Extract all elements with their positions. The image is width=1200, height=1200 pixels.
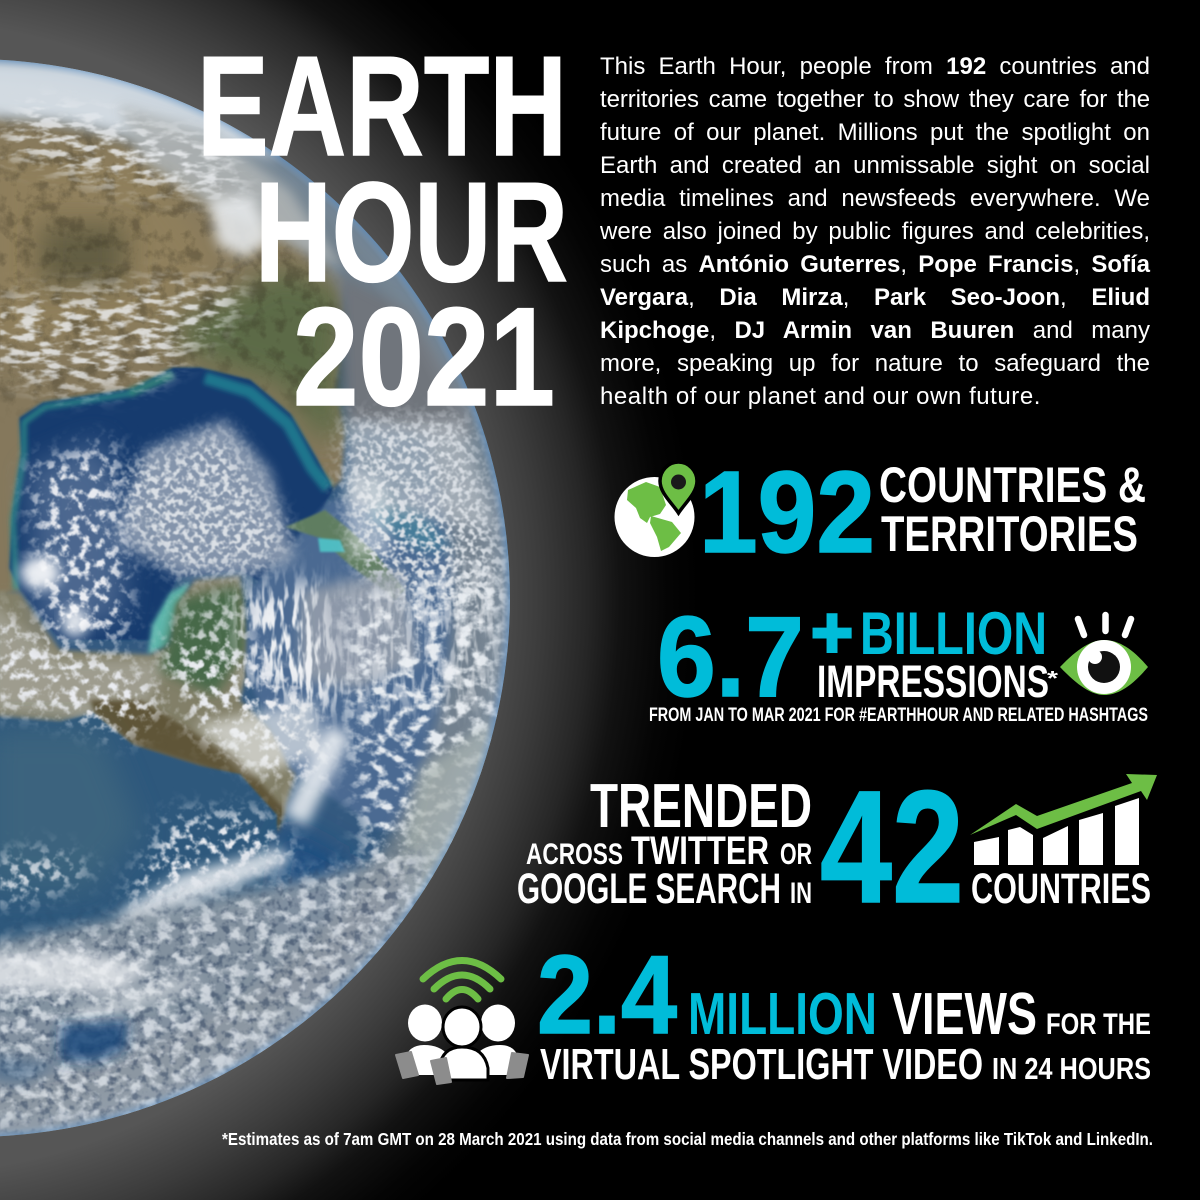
- stat: trended in 42 countries: TRENDED: [590, 772, 812, 841]
- title: [197, 27, 568, 435]
- intro paragraph: more, speaking up for nature to safeguard the: [600, 350, 1150, 376]
- atmosphere limb: [0, 59, 510, 1137]
- dark water south: [60, 1020, 128, 1062]
- intro paragraph: media timelines and newsfeeds everywhere. We: [600, 184, 1150, 212]
- intro paragraph: Earth and created an unmissable sight on social: [600, 152, 1150, 178]
- stat: 6.7 billion impressions: [649, 593, 1148, 726]
- panama clouds: [295, 730, 340, 820]
- intro paragraph: territories came together to show they care for the: [600, 86, 1150, 112]
- stat: trended in 42 countries: GOOGLE SEARCH: [517, 865, 781, 913]
- intro paragraph: Kipchoge, DJ Armin van Buuren and many: [600, 316, 1150, 344]
- stat: 2.4 million views: VIEWS: [892, 981, 1037, 1047]
- stat: 2.4 million views: 2.4: [537, 933, 677, 1057]
- stat: 2.4 million views: [396, 933, 1151, 1089]
- stat: 6.7 billion impressions: BILLION: [860, 600, 1047, 667]
- icon: audience with wifi signal: [396, 960, 528, 1084]
- stat: trended in 42 countries: 42: [820, 757, 964, 936]
- gulf coastal shallows: [13, 374, 328, 590]
- icon: rising bar chart with arrow: [970, 774, 1157, 865]
- intro paragraph: were also joined by public figures and celebrities,: [600, 218, 1150, 244]
- stat: 6.7 billion impressions: 6.7: [657, 594, 804, 721]
- stat: trended in 42 countries: ACROSS: [526, 838, 623, 871]
- stat: 2.4 million views: MILLION: [688, 981, 877, 1047]
- intro paragraph: such as António Guterres, Pope Francis, Sofía: [600, 250, 1150, 278]
- icon: globe with location pin: [614, 462, 697, 557]
- title: HOUR: [255, 153, 568, 312]
- stat: 2.4 million views: IN 24 HOURS: [992, 1051, 1151, 1086]
- icon: eye: [1060, 615, 1148, 695]
- intro paragraph: This Earth Hour, people from 192 countries and: [600, 52, 1150, 80]
- stat: trended in 42 countries: OR: [780, 838, 812, 871]
- stat: 6.7 billion impressions: *: [1047, 668, 1058, 690]
- intro paragraph: future of our planet. Millions put the spotlight on: [600, 118, 1150, 146]
- intro paragraph: [600, 52, 1150, 410]
- stat: 6.7 billion impressions: +: [811, 593, 853, 673]
- title: EARTH: [197, 27, 567, 186]
- land clouds: [0, 280, 240, 395]
- limb cloud haze: [0, 88, 481, 1108]
- title: 2021: [293, 278, 555, 435]
- stat: trended in 42 countries: TWITTER: [631, 829, 769, 873]
- gulf of mexico: [10, 368, 333, 640]
- intro paragraph: Vergara, Dia Mirza, Park Seo-Joon, Eliud: [600, 284, 1150, 310]
- atlantic clouds: [345, 420, 505, 620]
- caribbean streak clouds: [300, 570, 420, 690]
- stat: 6.7 billion impressions: IMPRESSIONS: [817, 656, 1049, 707]
- polar cloud tops: [0, 58, 280, 160]
- stat: 2.4 million views: VIRTUAL SPOTLIGHT VIDEO: [540, 1040, 983, 1089]
- stat: trended in 42 countries: [517, 757, 1157, 936]
- north america land: [0, 80, 345, 600]
- stat: 2.4 million views: FOR THE: [1046, 1008, 1151, 1041]
- southern cloud sheet: [0, 850, 425, 1145]
- stat: 192 countries: 192: [699, 447, 875, 577]
- pacific cloud band: [115, 848, 292, 925]
- caribbean and atlantic sea: [245, 480, 520, 830]
- earth globe photo illustration: [0, 58, 520, 1145]
- mexico land and yucatan: [0, 575, 300, 829]
- cuba and bahamas: [285, 510, 405, 600]
- stat: trended in 42 countries: IN: [790, 877, 812, 910]
- intro paragraph: health of our planet and our own future.: [600, 382, 1041, 410]
- pacific ocean: [0, 712, 278, 832]
- stat: 192 countries: [614, 447, 1146, 577]
- gulf popcorn clouds: [115, 420, 295, 575]
